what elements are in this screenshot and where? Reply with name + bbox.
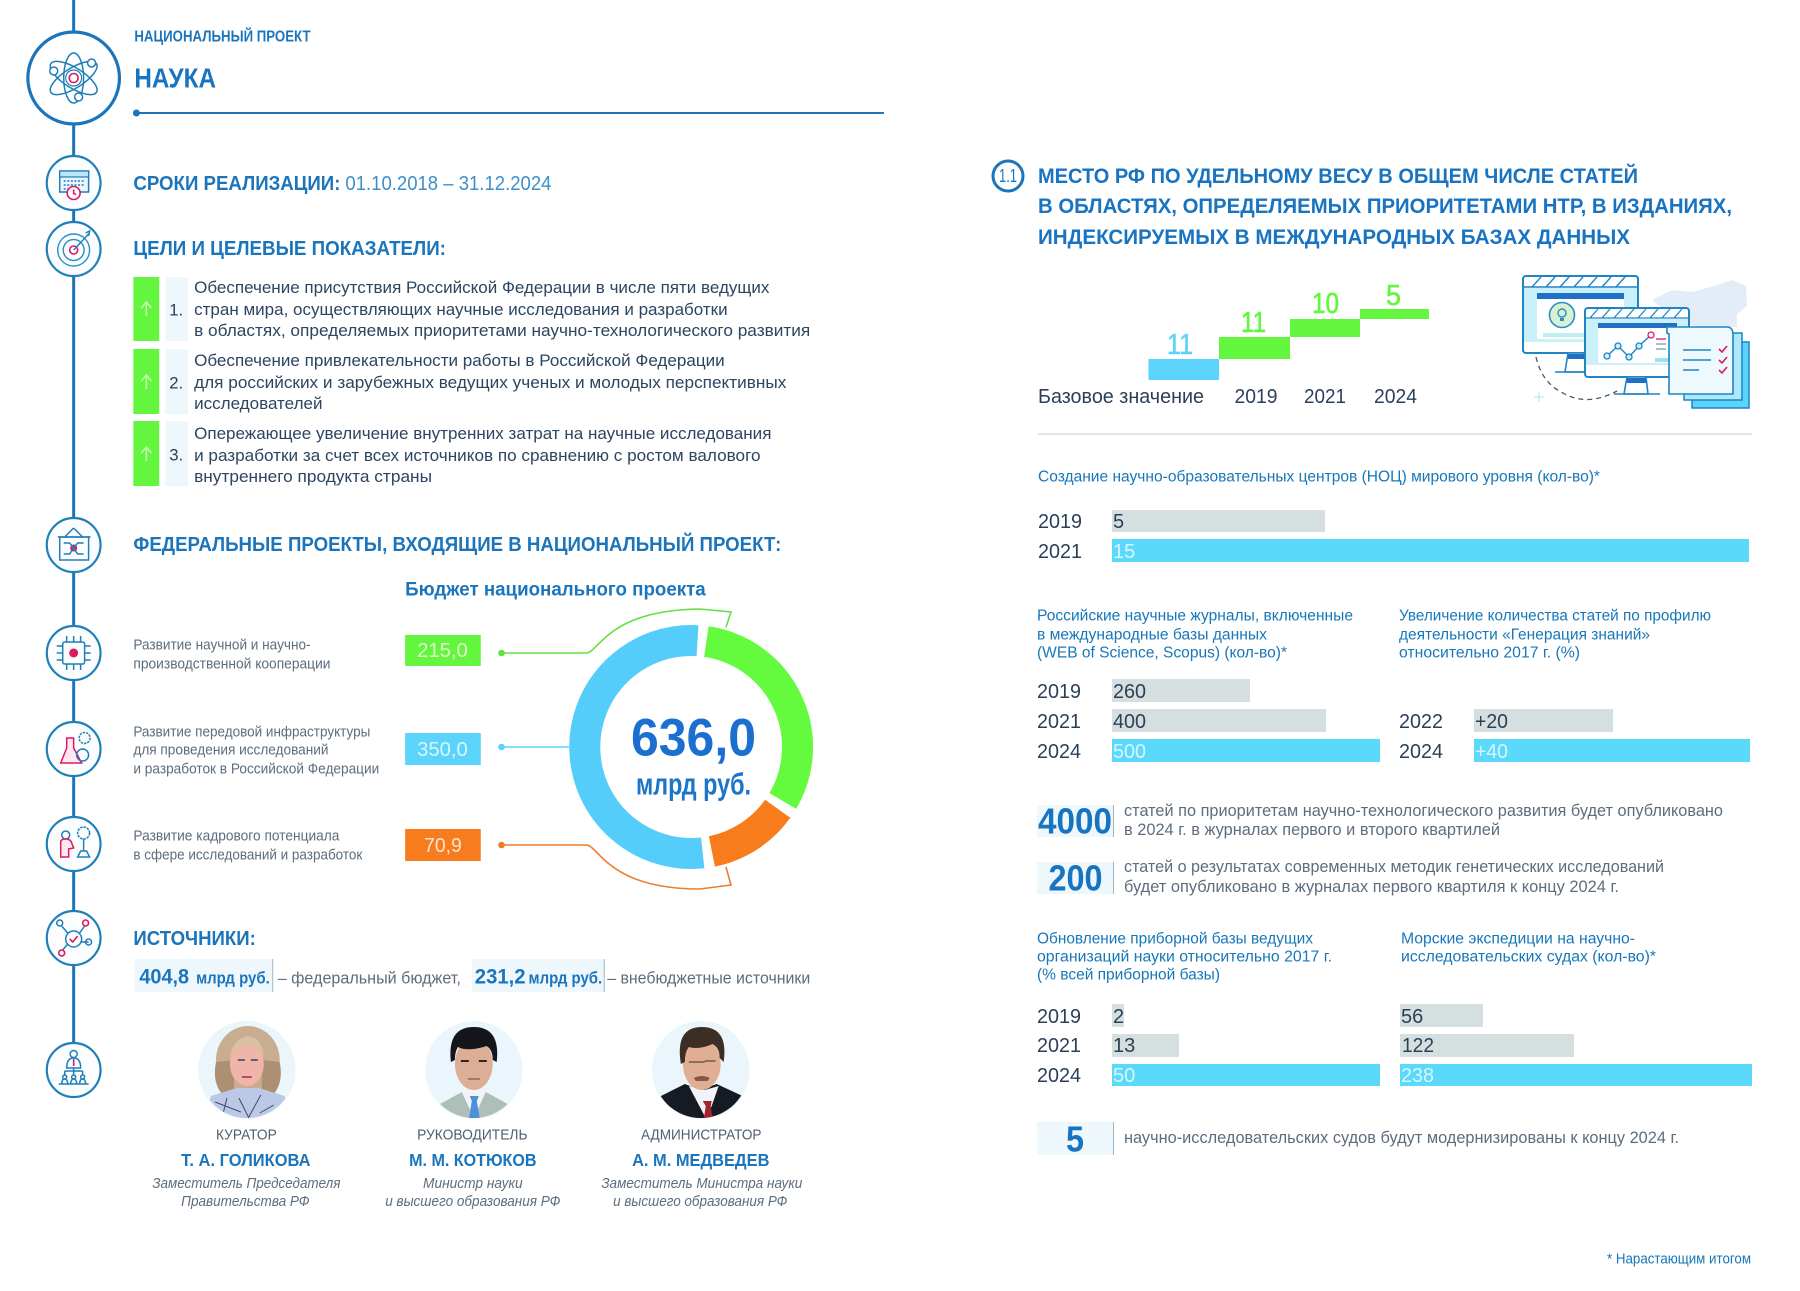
callout: 200 articles: статей о результатах современных методик генетических исследований bbox=[1124, 858, 1664, 876]
badge 1.1: 1.1 bbox=[999, 166, 1017, 186]
chart: research centers: 2021 bbox=[1038, 541, 1082, 563]
chart: equipment renewal: Обновление приборной базы ведущих bbox=[1037, 930, 1313, 948]
step chart: 2021 bbox=[1304, 386, 1346, 408]
person: curator bbox=[152, 1126, 341, 1210]
callout: 4000 articles: статей по приоритетам научно-технологического развития будет опубликовано bbox=[1124, 802, 1723, 820]
value 215,0 bbox=[405, 635, 481, 666]
chart: knowledge generation articles: 2022 bbox=[1399, 711, 1443, 733]
goal 1: Обеспечение присутствия Российской Федерации в числе пяти ведущих bbox=[194, 279, 770, 297]
goal 3: Опережающее увеличение внутренних затрат на научные исследования bbox=[194, 425, 771, 443]
federal projects heading: ФЕДЕРАЛЬНЫЕ ПРОЕКТЫ, ВХОДЯЩИЕ В НАЦИОНАЛЬНЫЙ ПРОЕКТ: bbox=[133, 532, 781, 556]
chart: equipment renewal bbox=[1037, 930, 1380, 1087]
sources row: 404,8 bbox=[139, 965, 189, 989]
donut chart bbox=[585, 641, 798, 854]
indicator title: ИНДЕКСИРУЕМЫХ В МЕЖДУНАРОДНЫХ БАЗАХ ДАННЫХ bbox=[1038, 225, 1631, 249]
sources row: – федеральный бюджет, bbox=[278, 968, 461, 988]
step chart: 10 bbox=[1312, 288, 1339, 320]
goal 2 bbox=[133, 349, 787, 414]
person: head: М. М. КОТЮКОВ bbox=[409, 1150, 537, 1170]
chart: journals: в международные базы данных bbox=[1037, 626, 1267, 644]
title underline bbox=[133, 110, 884, 116]
icon: flask bbox=[47, 722, 101, 776]
person: administrator bbox=[601, 1126, 802, 1210]
chart: research centers: 2019 bbox=[1038, 511, 1082, 533]
timeline spine bbox=[72, 0, 75, 1045]
illustration: monitors and checklist bbox=[1523, 276, 1749, 408]
chart: knowledge generation articles: +20 bbox=[1475, 711, 1508, 733]
step chart: 2024 bbox=[1374, 386, 1417, 408]
icon: federal projects board bbox=[47, 518, 101, 572]
portrait: Medvedev bbox=[652, 1021, 750, 1122]
indicator title: МЕСТО РФ ПО УДЕЛЬНОМУ ВЕСУ В ОБЩЕМ ЧИСЛЕ СТАТЕЙ bbox=[1038, 163, 1638, 188]
icon: sources network bbox=[47, 911, 101, 965]
project 1 description: Развитие научной и научно- bbox=[133, 636, 311, 654]
goal 2: 2. bbox=[169, 373, 183, 393]
icon: team hierarchy bbox=[47, 1043, 101, 1097]
person: curator: КУРАТОР bbox=[216, 1126, 277, 1144]
chart: equipment renewal: организаций науки относительно 2017 г. bbox=[1037, 948, 1332, 966]
callout: 4000 articles: 4000 bbox=[1038, 800, 1112, 842]
donut total: 636,0 bbox=[631, 708, 756, 768]
callout: 4000 articles bbox=[1037, 800, 1723, 842]
chart: sea expeditions: 238 bbox=[1401, 1065, 1434, 1087]
step chart: Базовое значение bbox=[1038, 386, 1204, 408]
value 350,0 bbox=[405, 733, 481, 765]
chart: sea expeditions: исследовательских судах (кол-во)* bbox=[1401, 948, 1656, 966]
person: curator: Заместитель Председателя bbox=[152, 1176, 341, 1192]
person: curator: Правительства РФ bbox=[181, 1194, 310, 1210]
icon: people and flower bbox=[47, 817, 101, 871]
footnote: * Нарастающим итогом bbox=[1607, 1250, 1751, 1268]
callout: 200 articles: будет опубликовано в журналах первого квартиля к концу 2024 г. bbox=[1124, 878, 1619, 896]
callout: 5 vessels: 5 bbox=[1066, 1118, 1084, 1160]
step chart: 11 bbox=[1167, 329, 1193, 361]
person: curator: Т. А. ГОЛИКОВА bbox=[181, 1150, 311, 1170]
portrait: Kotyukov bbox=[425, 1021, 523, 1119]
sources row: млрд руб. bbox=[196, 968, 270, 988]
callout: 5 vessels: научно-исследовательских судов будут модернизированы к концу 2024 г. bbox=[1124, 1129, 1679, 1147]
step chart: 5 bbox=[1386, 280, 1401, 312]
goal 1: стран мира, осуществляющих научные исследования и разработки bbox=[194, 301, 728, 319]
value 70,9: 70,9 bbox=[424, 835, 462, 857]
chart: equipment renewal: 2019 bbox=[1037, 1006, 1081, 1028]
project 3 description: Развитие кадрового потенциала bbox=[133, 827, 340, 845]
value 70,9 bbox=[405, 829, 481, 861]
goal 2: исследователей bbox=[194, 395, 323, 413]
project 3 description bbox=[133, 827, 363, 864]
step chart bbox=[1038, 280, 1429, 408]
timing line: 01.10.2018 – 31.12.2024 bbox=[345, 173, 551, 195]
project 2 description: и разработок в Российской Федерации bbox=[133, 760, 379, 778]
person: administrator: и высшего образования РФ bbox=[613, 1194, 787, 1210]
goal 2: Обеспечение привлекательности работы в Российской Федерации bbox=[194, 352, 725, 370]
chart: sea expeditions: Морские экспедиции на научно- bbox=[1401, 930, 1635, 948]
callout: 200 articles: 200 bbox=[1048, 858, 1102, 898]
timing line bbox=[133, 173, 551, 195]
project 1 description: производственной кооперации bbox=[133, 655, 330, 673]
header label: НАЦИОНАЛЬНЫЙ ПРОЕКТ bbox=[134, 27, 311, 46]
chart: journals: 2024 bbox=[1037, 741, 1081, 763]
sources row: – внебюджетные источники bbox=[607, 968, 810, 988]
callout: 4000 articles: в 2024 г. в журналах первого и второго квартилей bbox=[1124, 821, 1500, 839]
person: head bbox=[385, 1126, 560, 1210]
project 2 description bbox=[133, 723, 379, 778]
goal 3: 3. bbox=[169, 445, 183, 465]
goal 1 bbox=[133, 277, 810, 341]
chart: research centers: 5 bbox=[1113, 511, 1124, 533]
chart: knowledge generation articles: Увеличение количества статей по профилю bbox=[1399, 608, 1711, 624]
left column bbox=[28, 0, 884, 1210]
sources row: 231,2 bbox=[475, 965, 526, 989]
chart: sea expeditions: 122 bbox=[1402, 1035, 1434, 1057]
portrait: Golikova bbox=[198, 1021, 296, 1121]
connector: blue bbox=[499, 744, 569, 750]
project 3 description: в сфере исследований и разработок bbox=[133, 846, 363, 864]
goal 3: внутреннего продукта страны bbox=[194, 468, 432, 486]
chart: knowledge generation articles: деятельности «Генерация знаний» bbox=[1399, 626, 1650, 644]
sources row: млрд руб. bbox=[529, 968, 602, 988]
project 2 description: Развитие передовой инфраструктуры bbox=[133, 723, 370, 741]
chart: equipment renewal: 2 bbox=[1113, 1006, 1124, 1028]
icon: target bbox=[47, 222, 101, 276]
divider bbox=[1038, 433, 1752, 435]
indicator title: В ОБЛАСТЯХ, ОПРЕДЕЛЯЕМЫХ ПРИОРИТЕТАМИ НТР, В ИЗДАНИЯХ, bbox=[1038, 194, 1732, 218]
goal 1: 1. bbox=[169, 300, 183, 320]
goal 3 bbox=[133, 421, 771, 486]
chart: journals: 260 bbox=[1113, 681, 1146, 703]
badge 1.1 bbox=[993, 161, 1023, 191]
timing line: СРОКИ РЕАЛИЗАЦИИ: bbox=[133, 173, 340, 195]
chart: knowledge generation articles bbox=[1399, 608, 1750, 763]
step chart: 11 bbox=[1241, 307, 1266, 339]
chart: equipment renewal: (% всей приборной базы) bbox=[1037, 966, 1220, 984]
chart: journals: 400 bbox=[1113, 711, 1146, 733]
donut total: млрд руб. bbox=[636, 766, 751, 802]
person: administrator: Заместитель Министра науки bbox=[601, 1176, 802, 1192]
person: head: и высшего образования РФ bbox=[385, 1194, 560, 1210]
value 215,0: 215,0 bbox=[417, 640, 468, 662]
chart: journals bbox=[1037, 608, 1380, 763]
chart: journals: Российские научные журналы, включенные bbox=[1037, 608, 1353, 624]
chart: equipment renewal: 13 bbox=[1113, 1035, 1135, 1057]
step chart: 2019 bbox=[1234, 386, 1278, 408]
person: administrator: А. М. МЕДВЕДЕВ bbox=[632, 1150, 769, 1170]
icon: chip bbox=[47, 626, 101, 680]
icon: calendar bbox=[47, 156, 101, 210]
chart: research centers: 15 bbox=[1113, 541, 1135, 563]
chart: research centers: Создание научно-образовательных центров (НОЦ) мирового уровня (кол-во)* bbox=[1038, 468, 1600, 486]
callout: 200 articles bbox=[1037, 858, 1664, 898]
value 350,0: 350,0 bbox=[417, 739, 468, 761]
goal 2: для российских и зарубежных ведущих ученых и молодых перспективных bbox=[194, 374, 787, 392]
chart: journals: 500 bbox=[1113, 741, 1146, 763]
title: НАУКА bbox=[134, 62, 216, 94]
person: head: РУКОВОДИТЕЛЬ bbox=[417, 1126, 528, 1144]
goal 3: и разработки за счет всех источников по сравнению с ростом валового bbox=[194, 447, 760, 465]
project 2 description: для проведения исследований bbox=[133, 741, 328, 759]
chart: knowledge generation articles: +40 bbox=[1475, 741, 1508, 763]
chart: equipment renewal: 2024 bbox=[1037, 1065, 1081, 1087]
chart: journals: (WEB of Science, Scopus) (кол-во)* bbox=[1037, 644, 1287, 662]
goals heading: ЦЕЛИ И ЦЕЛЕВЫЕ ПОКАЗАТЕЛИ: bbox=[133, 238, 446, 260]
chart: equipment renewal: 50 bbox=[1113, 1065, 1135, 1087]
donut total bbox=[631, 708, 756, 802]
icon: atom bbox=[28, 32, 119, 124]
indicator title bbox=[1038, 163, 1732, 249]
chart: journals: 2021 bbox=[1037, 711, 1081, 733]
project 1 description bbox=[133, 636, 330, 673]
callout: 5 vessels bbox=[1037, 1118, 1679, 1160]
chart: knowledge generation articles: 2024 bbox=[1399, 741, 1443, 763]
chart: research centers bbox=[1038, 468, 1749, 563]
person: administrator: АДМИНИСТРАТОР bbox=[641, 1126, 761, 1144]
chart: knowledge generation articles: относительно 2017 г. (%) bbox=[1399, 644, 1580, 662]
chart: sea expeditions bbox=[1400, 930, 1752, 1087]
chart: journals: 2019 bbox=[1037, 681, 1081, 703]
sources heading: ИСТОЧНИКИ: bbox=[133, 928, 256, 950]
chart: sea expeditions: 56 bbox=[1401, 1006, 1423, 1028]
connector: orange bbox=[499, 842, 731, 889]
budget heading: Бюджет национального проекта bbox=[405, 579, 706, 601]
person: head: Министр науки bbox=[423, 1176, 523, 1192]
chart: equipment renewal: 2021 bbox=[1037, 1035, 1081, 1057]
goal 1: в областях, определяемых приоритетами научно-технологического развития bbox=[194, 322, 810, 340]
sources row bbox=[134, 959, 810, 992]
connector: green bbox=[499, 609, 731, 656]
